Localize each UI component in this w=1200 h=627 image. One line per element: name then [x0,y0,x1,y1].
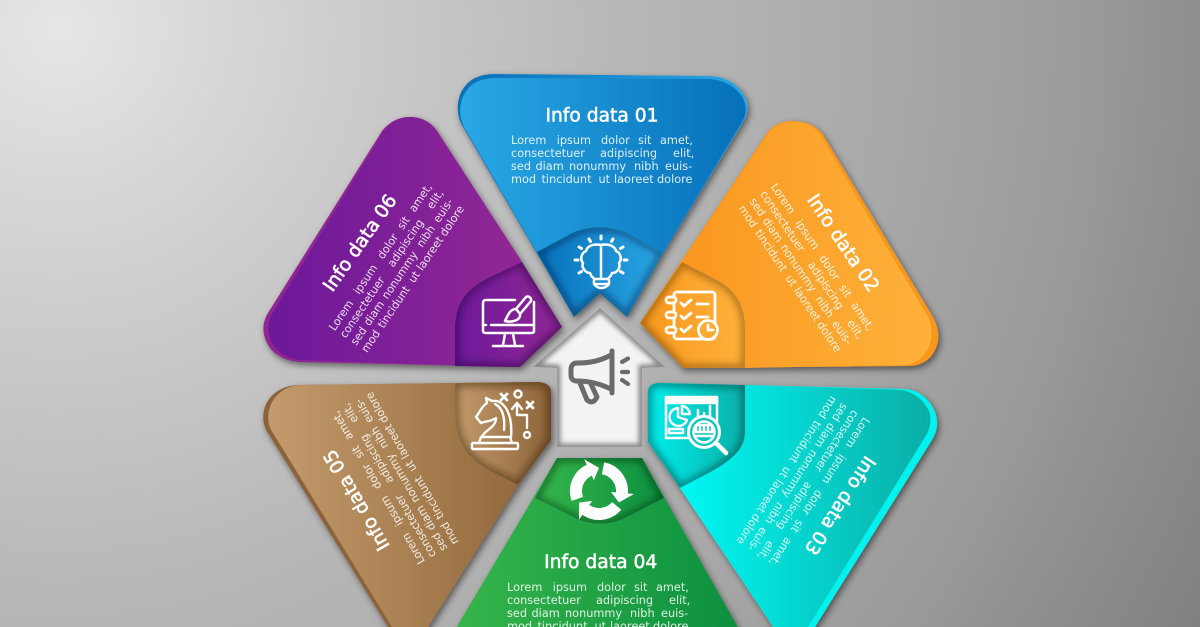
text block: panel 06 body: dolor [375,231,401,262]
heading: Info data 03: Info data 03 [800,452,879,558]
text block: panel 05 body: dolor [359,461,385,492]
text block: panel 01 body: dolore [657,173,693,186]
text block: panel 06 body: nibh [414,223,438,250]
text block: panel 04 body: ipsum [553,581,587,594]
text block: panel 04 body: elit, [669,594,690,607]
heading: Info data 01: Info data 01 [545,106,659,127]
text block: panel 06 body: tincidunt [375,283,413,331]
text block: panel 06 body: ut [406,268,423,285]
text block: panel 02 body: tincidunt [752,227,790,275]
text block: panel 03 body: diam [812,420,838,450]
text block: panel 06 body: mod [359,328,383,355]
text block: panel 01 body: ipsum [557,134,591,147]
text block: panel 03 body: tincidunt [786,418,824,466]
text block: panel 02 body: ut [783,272,800,290]
text block: panel 03 body: dolor [799,487,825,518]
center arrow with megaphone [533,308,665,447]
text block: panel 05 body: mod [438,520,462,547]
text block: panel 06 body: consectetuer [337,274,388,340]
text block: panel 01 body: dolor [601,134,630,147]
text block: panel 01 body: consectetuer [511,147,585,160]
icon: recycle arrows [562,455,634,533]
panel: Info data 04 [449,455,745,627]
icon: analytics with magnifier [666,397,726,453]
text block: panel 03 body: ipsum [819,452,848,486]
icon: monitor with paint brush [483,297,534,346]
text block: panel 03 body: amet, [766,535,794,568]
text block: panel 01 body: ut [598,173,611,186]
text block: panel 02 body: euis- [829,318,855,347]
text block: panel 04 body: sit [634,581,648,594]
text block: panel 03 body: consectetuer [811,408,861,475]
text block: panel 05 body: nonummy [383,451,422,505]
text block: panel 02 body: nibh [812,293,837,320]
text block: panel 04 body: diam [532,607,560,620]
text block: panel 06 body: nonummy [379,248,421,302]
text block: panel 01 body: laoreet [614,173,654,186]
text block: panel 01 body: nonummy [569,160,626,173]
text block: panel 01 body: euis- [665,160,692,173]
text block: panel 01 body: diam [536,160,564,173]
text block: panel 05 body: diam [414,503,439,533]
heading: Info data 06: Info data 06 [319,191,402,296]
text block: panel 03 body: elit, [754,538,777,562]
text block: panel 05 body: elit, [340,401,361,425]
text block: panel 05 body: sit [349,443,367,461]
text block: panel 04 body: adipiscing [596,594,653,607]
text block: panel 05 body: amet, [329,409,356,443]
text block: panel 05 body: tincidunt [411,473,447,522]
text block: panel 01 body: Lorem [511,134,546,147]
text block: panel 05 body: dolore [363,389,392,426]
text block: panel 06 body: sit [395,213,413,232]
panel: Info data 03 [648,383,937,627]
text block: panel 05 body: Lorem [399,531,428,567]
text block: panel 05 body: nibh [368,424,391,451]
text block: panel 01 body: tincidunt [542,173,592,186]
text block: panel 06 body: amet, [406,181,435,215]
text block: panel 04 body: Lorem [507,581,542,594]
text block: panel 03 body: nonummy [779,447,820,501]
text block: panel 03 body: mod [815,394,840,421]
text block: panel 03 body: laoreet [753,476,786,516]
text block: panel 03 body: sit [787,517,806,536]
heading: Info data 05: Info data 05 [320,446,395,554]
text block: panel 02 body: dolor [816,253,843,283]
panel: Info data 06 [263,117,562,367]
text block: panel 02 body: elit, [844,317,867,341]
text block: panel 06 body: laoreet [414,234,447,273]
text block: panel 06 body: dolore [437,203,467,239]
text block: panel 02 body: consectetuer [757,188,808,255]
text block: panel 02 body: Lorem [768,181,798,216]
icon: chess knight with strategy marks [472,390,533,449]
text block: panel 05 body: adipiscing [357,432,396,486]
text block: panel 04 body: consectetuer [507,594,581,607]
text block: panel 06 body: adipiscing [385,217,427,270]
text block: panel 05 body: sed [429,530,450,554]
text block: panel 06 body: sed [348,324,370,348]
text block: panel 05 body: consectetuer [392,492,439,560]
text block: panel 03 body: euis- [745,525,770,554]
text block: panel 01 body: elit, [673,147,694,160]
text block: panel 04 body: euis- [661,607,688,620]
text block: panel 04 body: nibh [630,607,655,620]
text block: panel 03 body: nibh [762,500,786,527]
icon: megaphone [571,351,628,402]
text block: panel 01 body: amet, [660,134,693,147]
text block: panel 04 body: dolor [597,581,626,594]
text block: panel 02 body: laoreet [791,285,824,324]
text block: panel 02 body: sed [746,195,768,219]
text block: panel 03 body: Lorem [843,415,872,450]
text block: panel 04 body: sed [507,607,527,620]
icon: brain light bulb [575,236,627,288]
panel: Info data 01 [458,74,747,317]
panel: Info data 02 [640,121,938,368]
text block: panel 06 body: diam [361,298,387,328]
text block: panel 05 body: ipsum [378,493,406,529]
icon: checklist with clock [666,292,718,340]
text block: panel 06 body: ipsum [351,262,380,297]
text block: panel 02 body: adipiscing [805,259,847,312]
text block: panel 04 body: nonummy [565,607,622,620]
text block: panel 03 body: sed [829,401,850,424]
text block: panel 02 body: diam [760,215,786,245]
text block: panel 02 body: mod [736,203,760,230]
heading: Info data 04: Info data 04 [544,552,657,573]
text block: panel 06 body: Lorem [326,298,356,333]
text block: panel 03 body: ut [776,464,794,481]
text block: panel 06 body: elit, [424,187,446,212]
text block: panel 05 body: euis- [352,396,376,425]
text block: panel 01 body: nibh [634,160,659,173]
text block: panel 01 body: sit [638,134,652,147]
text block: panel 02 body: nonummy [778,242,819,295]
text block: panel 06 body: euis- [431,196,456,225]
text block: panel 01 body: adipiscing [600,147,657,160]
text block: panel 03 body: dolore [733,511,763,547]
text block: panel 01 body: sed [511,160,531,173]
text block: panel 02 body: sit [836,282,855,301]
text block: panel 01 body: mod [511,173,536,186]
text block: panel 02 body: dolore [814,319,844,355]
text block: panel 05 body: laoreet [381,421,412,461]
text block: panel 03 body: adipiscing [774,479,815,533]
text block: panel 02 body: amet, [848,300,877,333]
text block: panel 04 body: amet, [656,581,689,594]
text block: panel 05 body: ut [402,457,420,474]
heading: Info data 02: Info data 02 [802,191,883,296]
text block: panel 02 body: ipsum [792,217,822,252]
panel: Info data 05 [263,382,551,627]
